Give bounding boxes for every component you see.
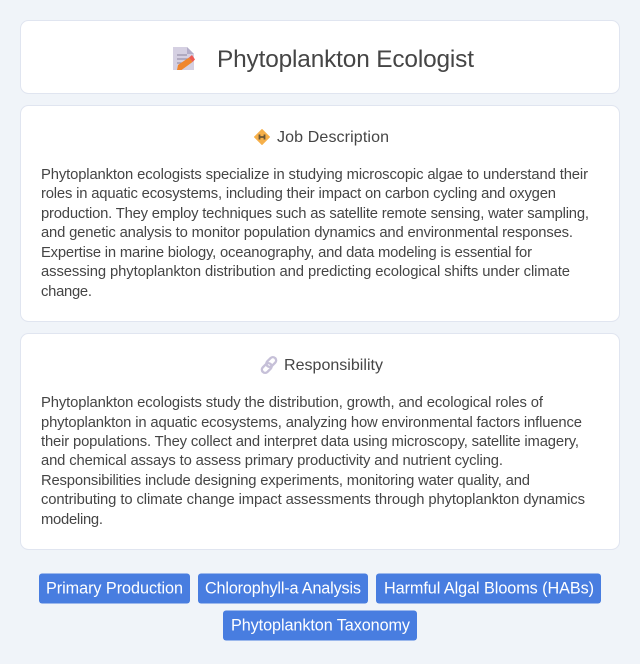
text block: responsibility: Phytoplankton ecologists study the distribution, growth, and ecological roles of bbox=[41, 395, 544, 411]
text block: job description: roles in aquatic ecosystems, including their impact on carbon cycling and oxygen bbox=[41, 186, 556, 202]
text block: responsibility: and chemical assays to assess primary productivity and nutrient cycling. bbox=[41, 453, 503, 469]
title: Phytoplankton Ecologist bbox=[217, 46, 474, 73]
text block: job description: Expertise in marine biology, oceanography, and data modeling is essential for bbox=[41, 245, 532, 261]
text block: job description: and genetic analysis to monitor population dynamics and environmental responses. bbox=[41, 225, 573, 241]
text block: responsibility: modeling. bbox=[41, 512, 103, 528]
text block: responsibility: their populations. They collect and interpret data using microscopy, satellite imagery, bbox=[41, 434, 579, 450]
icon: document with pencil bbox=[173, 47, 195, 70]
heading: job description: Job Description bbox=[277, 129, 389, 146]
panel: header bbox=[20, 20, 620, 94]
tag: chlorophyll-a analysis bbox=[198, 574, 368, 604]
tag: harmful algal blooms bbox=[376, 574, 601, 604]
text block: responsibility bbox=[41, 395, 585, 528]
panel: responsibility bbox=[20, 334, 620, 550]
tag: phytoplankton taxonomy: Phytoplankton Taxonomy bbox=[231, 616, 411, 634]
icon: chain link bbox=[261, 356, 277, 374]
text block: job description: change. bbox=[41, 284, 92, 300]
text block: job description bbox=[41, 167, 589, 300]
text block: job description: production. They employ techniques such as satellite remote sensing, water sampling, bbox=[41, 206, 589, 222]
panel: job description bbox=[20, 106, 620, 322]
icon: orange diamond bbox=[254, 130, 270, 144]
text block: responsibility: phytoplankton in aquatic ecosystems, analyzing how environmental factors influence bbox=[41, 415, 582, 431]
text block: responsibility: contributing to climate change impact assessments through phytoplankton dynamics bbox=[41, 492, 585, 508]
tag: harmful algal blooms: Harmful Algal Blooms (HABs) bbox=[384, 580, 594, 598]
text block: job description: assessing phytoplankton distribution and predicting ecological shifts under climate bbox=[41, 264, 570, 280]
heading: responsibility: Responsibility bbox=[284, 357, 383, 374]
tag: primary production: Primary Production bbox=[46, 580, 183, 598]
tag: phytoplankton taxonomy bbox=[223, 610, 417, 640]
text block: responsibility: Responsibilities include designing experiments, monitoring water quality, and bbox=[41, 473, 530, 489]
text block: job description: Phytoplankton ecologists specialize in studying microscopic algae to understand their bbox=[41, 167, 588, 183]
tag: primary production bbox=[39, 574, 190, 604]
tag: chlorophyll-a analysis: Chlorophyll-a Analysis bbox=[205, 580, 361, 598]
